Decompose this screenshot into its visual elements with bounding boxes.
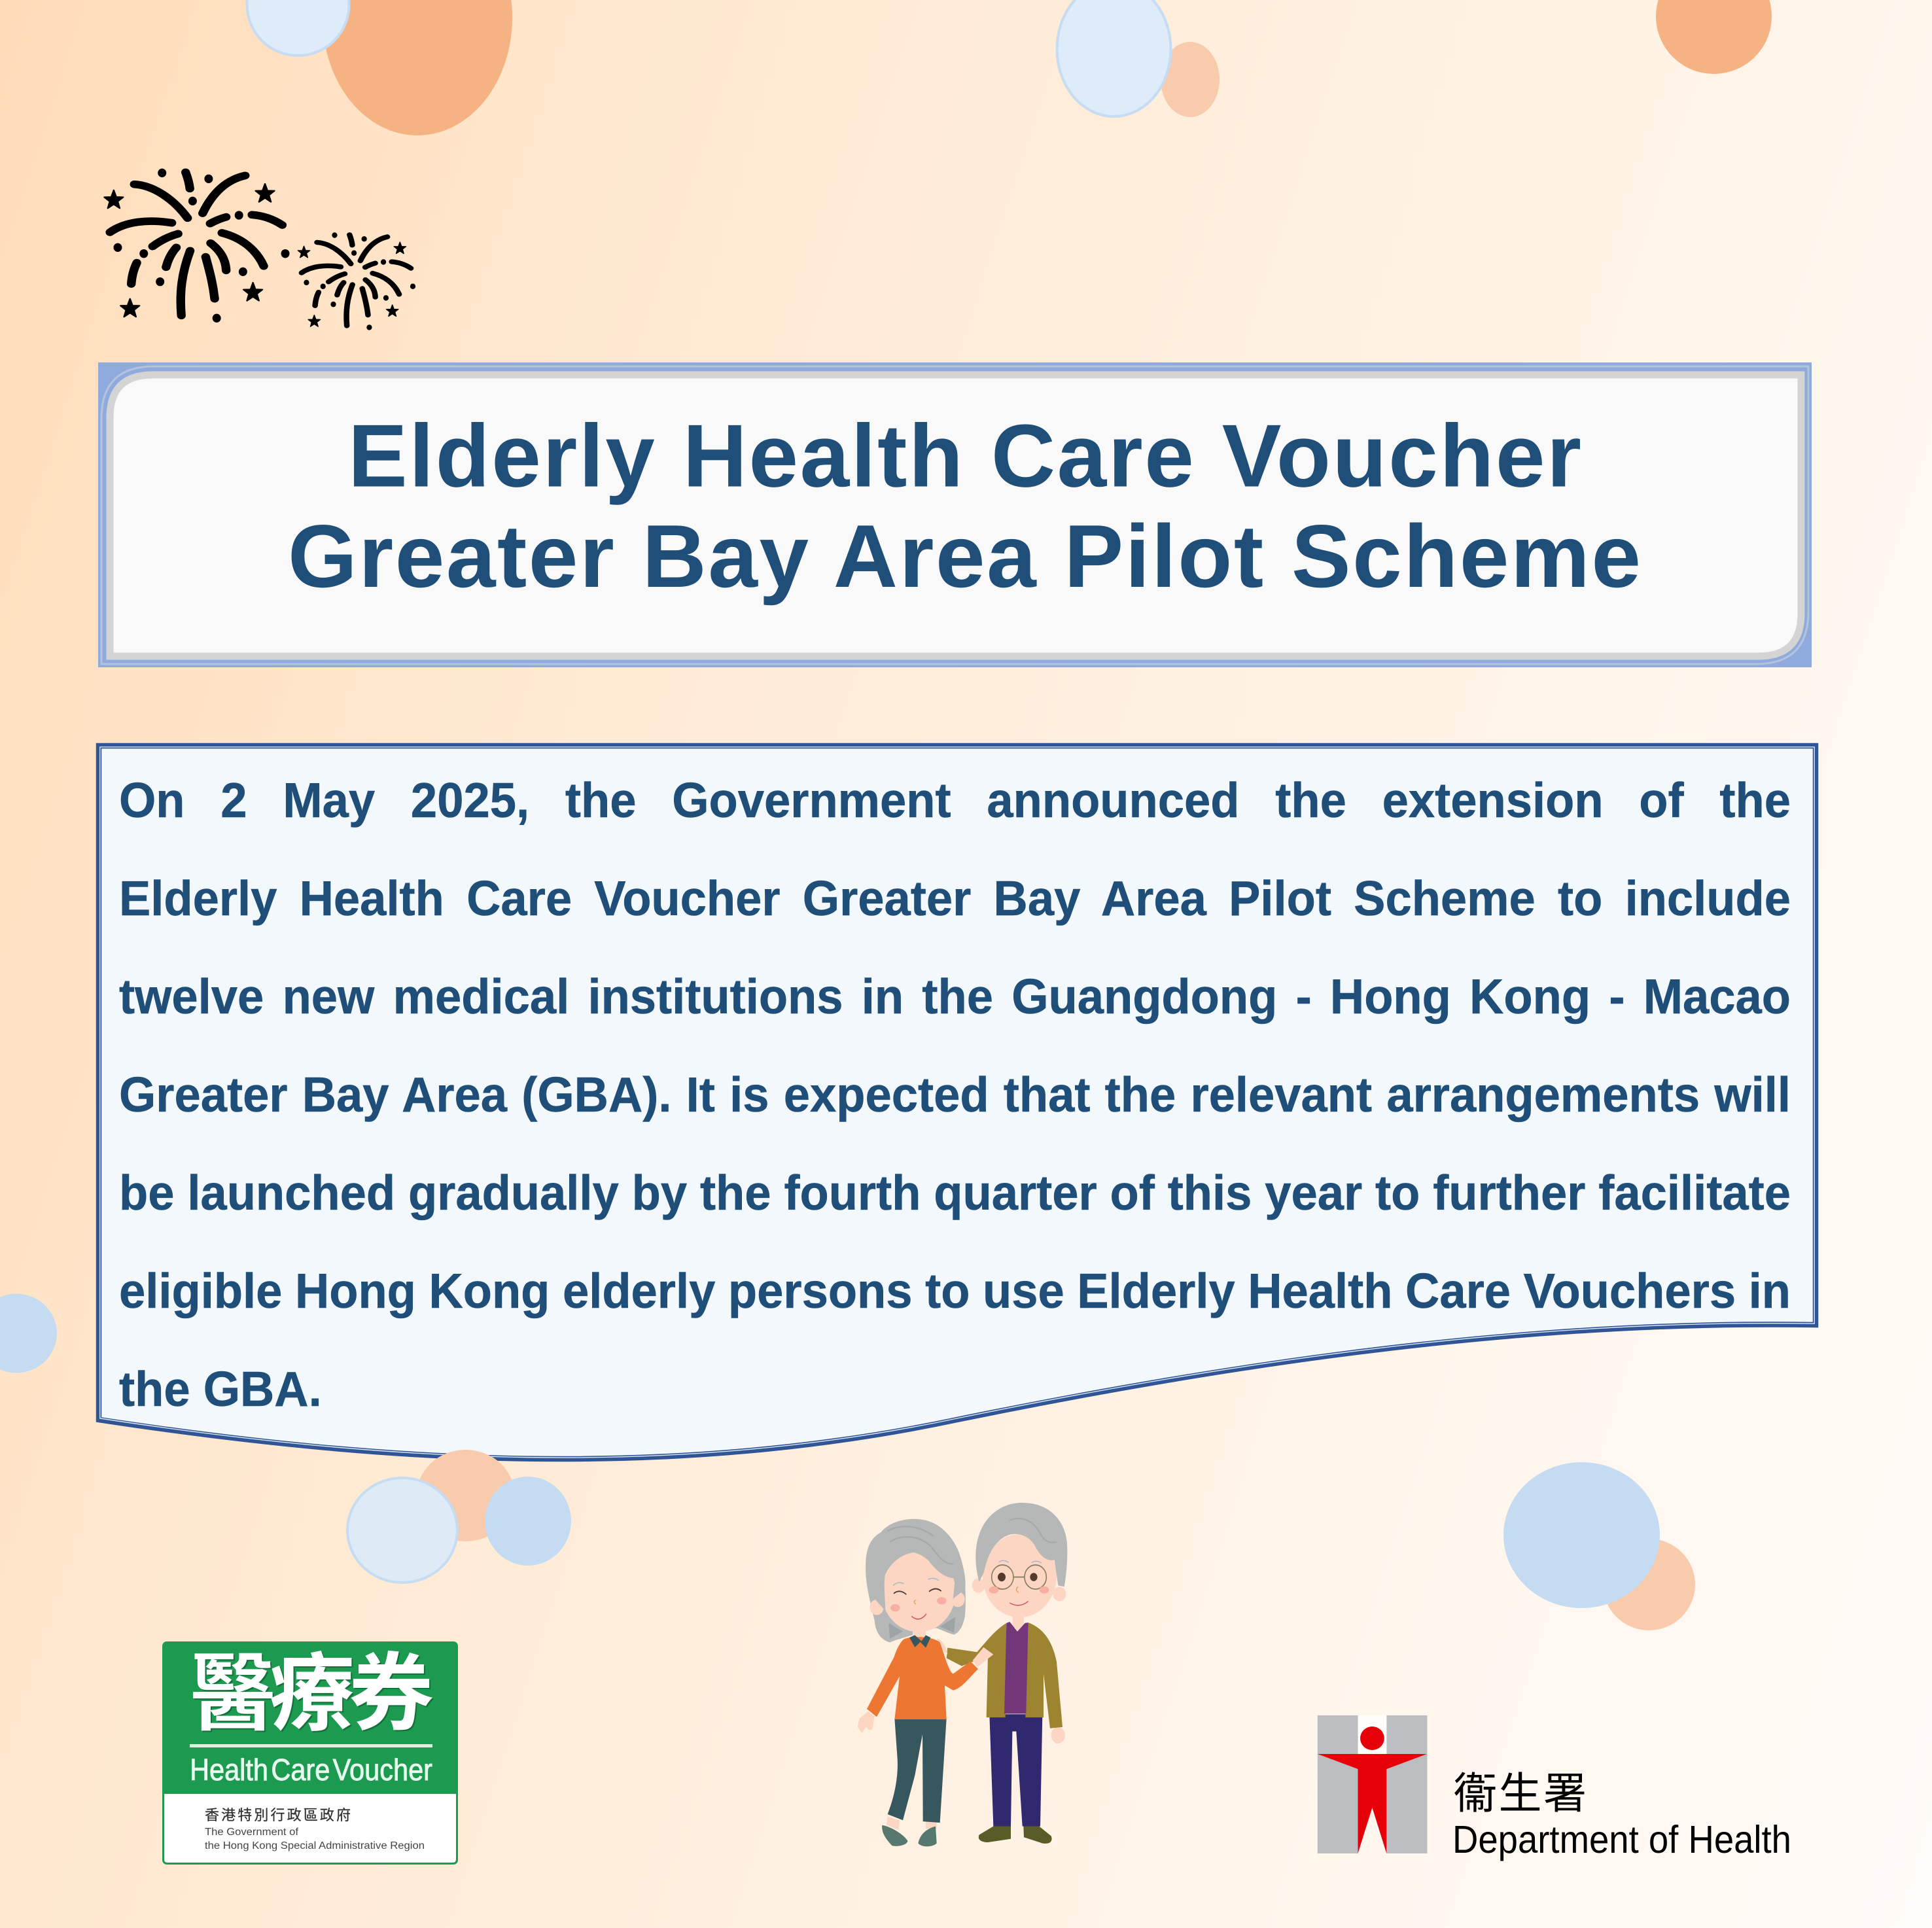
title heading: Greater Bay Area Pilot Scheme: [288, 506, 1641, 606]
logo: Health Care Voucher: Health Care Voucher: [190, 1753, 432, 1787]
logo: Department of Health: [1318, 1715, 1791, 1861]
logo: Health Care Voucher: 醫療券: [190, 1646, 434, 1742]
text block: announcement paragraph: eligible Hong Kong elderly persons to use Elderly Health Care Vouchers in: [119, 1264, 1791, 1319]
title heading: Elderly Health Care Voucher: [348, 406, 1581, 505]
logo: Health Care Voucher: The Government of: [205, 1827, 299, 1838]
logo: Health Care Voucher: [162, 1641, 458, 1865]
text block: announcement paragraph: Greater Bay Area (GBA). It is expected that the relevant arrangements will: [119, 1068, 1791, 1123]
title heading: [288, 406, 1641, 606]
text block: announcement paragraph: On 2 May 2025, the Government announced the extension of the: [119, 773, 1791, 828]
illustration: elderly couple: [858, 1503, 1067, 1846]
logo: Department of Health: 衞生署: [1454, 1769, 1587, 1817]
text block: announcement paragraph: Elderly Health Care Voucher Greater Bay Area Pilot Scheme to include: [119, 871, 1791, 926]
logo: Department of Health: Department of Health: [1452, 1818, 1791, 1861]
panel: announcement wave box: [99, 746, 1816, 1459]
text block: announcement paragraph: twelve new medical institutions in the Guangdong - Hong Kong - Macao: [119, 970, 1791, 1025]
text block: announcement paragraph: [119, 773, 1791, 1417]
panel: title banner: [98, 362, 1812, 667]
icon: fireworks: [104, 169, 415, 330]
lower bubbles: [0, 1294, 1695, 1630]
text block: announcement paragraph: be launched gradually by the fourth quarter of this year to further facilitate: [119, 1166, 1791, 1221]
top bubbles: [247, 0, 1772, 135]
logo: Health Care Voucher: 香港特別行政區政府: [205, 1807, 351, 1823]
woman: [858, 1519, 993, 1846]
text block: announcement paragraph: the GBA.: [119, 1362, 322, 1417]
logo: Health Care Voucher: the Hong Kong Special Administrative Region: [205, 1840, 425, 1851]
man: [937, 1503, 1067, 1844]
